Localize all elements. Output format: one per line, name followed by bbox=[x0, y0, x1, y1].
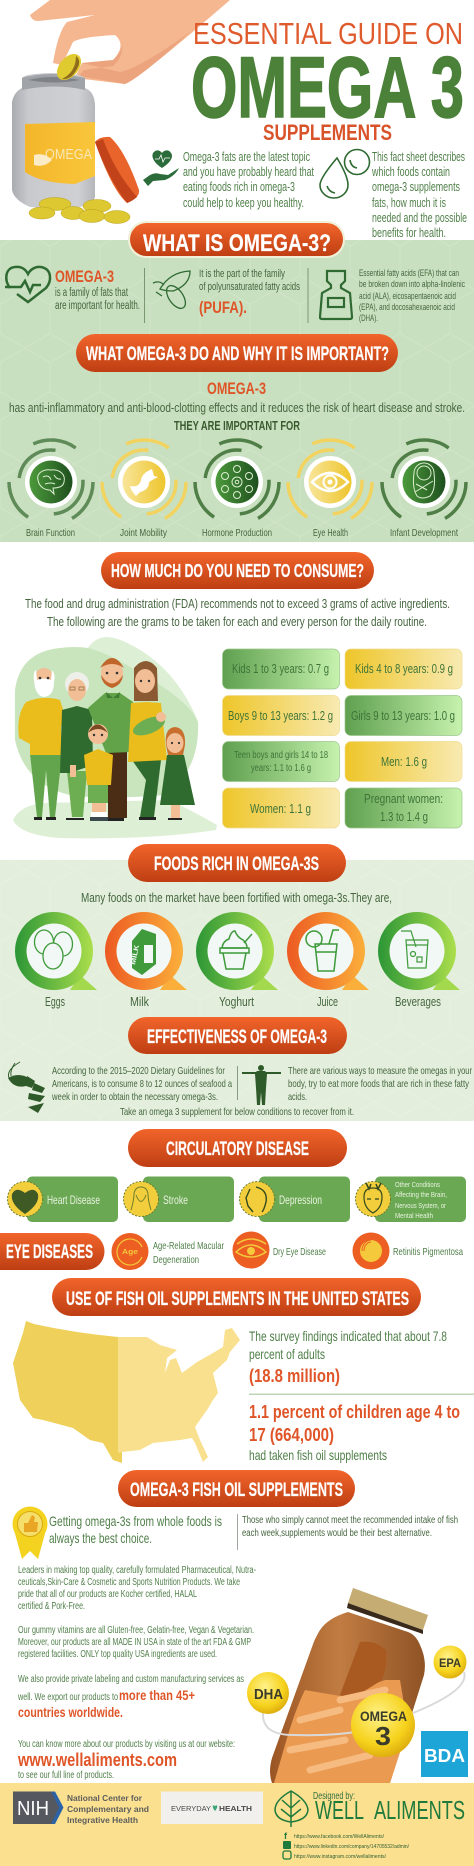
icon: heart in hand bbox=[143, 150, 179, 186]
intro text left: and you have probably heard that bbox=[183, 164, 314, 179]
logo: NIH bbox=[13, 1792, 149, 1825]
dosage tiles bbox=[222, 649, 462, 828]
intro text left: could help to keep you healthy. bbox=[183, 195, 304, 210]
dosage tiles: Men: 1.6 g bbox=[381, 755, 427, 769]
icon: DHA ball: DHA bbox=[254, 1686, 283, 1703]
social links: f bbox=[284, 1831, 288, 1841]
logo: NIH: Integrative Health bbox=[67, 1815, 138, 1825]
text: designed by well aliments: Designed by: bbox=[313, 1791, 355, 1802]
labels: omega-3 benefits: Hormone Production bbox=[202, 527, 272, 539]
icon: hand bbox=[30, 0, 230, 84]
card: heart disease: Heart Disease bbox=[47, 1193, 100, 1207]
dosage tiles: 1.3 to 1.4 g bbox=[380, 810, 428, 824]
icon: heart with pulse bbox=[5, 267, 50, 302]
heading: circulatory disease: CIRCULATORY DISEASE bbox=[166, 1139, 309, 1160]
illustration: hand dropping a capsule into a jar bbox=[12, 0, 230, 224]
text block: dietary guidelines bbox=[51, 1065, 232, 1103]
social links bbox=[283, 1831, 409, 1860]
icon: EPA ball bbox=[434, 1646, 466, 1678]
icon: eye health bbox=[288, 440, 372, 518]
text: whole foods: always the best choice. bbox=[49, 1530, 152, 1546]
panel: what is omega-3 background bbox=[0, 240, 474, 542]
text: designed by well aliments: WELL bbox=[315, 1795, 364, 1825]
card: other conditions bbox=[356, 1176, 466, 1222]
social links: https://www.linkedin.com/company/14705532/admin/ bbox=[294, 1844, 409, 1850]
text block: company description bbox=[17, 1565, 256, 1781]
text block: why important bbox=[9, 379, 465, 433]
card: other conditions: Other Conditions bbox=[395, 1180, 440, 1189]
text block: why important: THEY ARE IMPORTANT FOR bbox=[174, 418, 300, 433]
icon: jar lid bbox=[95, 137, 139, 203]
card: stroke: Stroke bbox=[163, 1193, 188, 1207]
icon: fish and capsule bbox=[153, 271, 190, 312]
card: other conditions: Nervous System, or bbox=[395, 1201, 446, 1210]
icon: beverages bbox=[378, 912, 460, 990]
text block: FDA recommendation bbox=[25, 596, 450, 629]
text block: PUFA: (PUFA). bbox=[199, 298, 247, 317]
logo: NIH: National Center for bbox=[67, 1793, 143, 1803]
text: alternative bbox=[242, 1515, 458, 1539]
text block: survey children: 17 (664,000) bbox=[249, 1425, 334, 1445]
icon: retinitis pigmentosa bbox=[352, 1232, 390, 1270]
text block: dietary guidelines: Americans, is to consume 8 to 12 ounces of seafood a bbox=[52, 1078, 232, 1090]
icon: jar: OMEGA bbox=[45, 146, 92, 163]
text: whole foods: Getting omega-3s from whole foods is bbox=[49, 1513, 222, 1529]
icon: jar bbox=[12, 73, 95, 209]
person: grandfather bbox=[18, 668, 67, 820]
text: whole foods bbox=[49, 1513, 222, 1546]
social links: https://www.instagram.com/wellaliments/ bbox=[294, 1854, 386, 1860]
icon: omega 3 ball bbox=[351, 1693, 415, 1757]
heading: eye diseases: EYE DISEASES bbox=[6, 1242, 93, 1263]
text block: survey children bbox=[249, 1402, 460, 1463]
text: macular degeneration: Degeneration bbox=[153, 1254, 199, 1266]
icon: bottle cap bbox=[348, 1588, 428, 1630]
person: father bbox=[88, 658, 133, 821]
logo: NIH: Complementary and bbox=[67, 1804, 149, 1814]
text block: measure omegas bbox=[288, 1065, 472, 1103]
logo: BDA: BDA bbox=[424, 1746, 465, 1766]
text block: company description: certified & Pork-Free. bbox=[18, 1601, 85, 1612]
social links: https://www.facebook.com/WellAliments/ bbox=[294, 1834, 384, 1840]
text block: omega-3 definition: are important for health. bbox=[55, 300, 140, 312]
person: boy bbox=[84, 724, 113, 821]
text block: company description: to see our full line of products. bbox=[18, 1770, 114, 1781]
card: depression bbox=[240, 1176, 350, 1222]
text block: company description: registered facilities. ONLY top quality USA ingredients are used. bbox=[18, 1649, 217, 1660]
text block: PUFA: of polyunsaturated fatty acids bbox=[199, 281, 300, 293]
icon: shrimp bbox=[8, 1062, 45, 1113]
icon: hormone production bbox=[195, 440, 279, 518]
heading: what is omega-3: WHAT IS OMEGA-3? bbox=[143, 230, 331, 257]
text block: survey adults: (18.8 million) bbox=[249, 1366, 340, 1386]
dosage tiles: Kids 1 to 3 years: 0.7 g bbox=[232, 662, 329, 676]
orbit lines bbox=[263, 1672, 465, 1735]
icon: age-related macular degeneration: Age bbox=[122, 1249, 138, 1256]
text block: omega-3 definition: is a family of fats that bbox=[55, 287, 129, 299]
text block: measure omegas: acids. bbox=[288, 1091, 307, 1103]
person: mother and baby bbox=[128, 661, 168, 820]
icon: infant development bbox=[382, 440, 466, 518]
icon: thumbs-up badge bbox=[12, 1506, 48, 1559]
icon: omega 3 ball: OMEGA bbox=[360, 1708, 407, 1724]
icon: dry eye bbox=[232, 1232, 270, 1268]
icon: milk bbox=[105, 912, 187, 990]
heading: use of fish oil bbox=[52, 1278, 421, 1316]
icon: EPA ball: EPA bbox=[439, 1656, 461, 1670]
icon: milk: MILK bbox=[130, 944, 141, 965]
heading: what omega-3 do bbox=[76, 334, 398, 372]
text block: essential fatty acids: (DHA). bbox=[359, 313, 378, 324]
illustration: omega-3 bottle bbox=[247, 1588, 466, 1783]
map: united states bbox=[13, 1321, 240, 1463]
icon: age-related macular degeneration bbox=[112, 1233, 148, 1270]
icon: bottle bbox=[320, 271, 352, 319]
text block: omega-3 definition: OMEGA-3 bbox=[55, 267, 114, 286]
text block: omega-3 definition bbox=[55, 267, 140, 312]
text block: dietary guidelines: According to the 2015–2020 Dietary Guidelines for bbox=[52, 1065, 225, 1077]
labels: foods: Eggs bbox=[45, 994, 65, 1009]
text block: company description: You can know more about our products by visiting us at our website: bbox=[18, 1739, 235, 1750]
heading: how much bbox=[101, 552, 374, 589]
heading: how much: HOW MUCH DO YOU NEED TO CONSUME? bbox=[111, 561, 364, 581]
illustration: family bbox=[13, 637, 217, 838]
text block: survey adults: percent of adults bbox=[249, 1346, 325, 1362]
text block: company description: more than 45+ bbox=[119, 1688, 195, 1703]
icon: brain function bbox=[9, 440, 93, 518]
heading: effectiveness bbox=[128, 1017, 347, 1054]
person: girl bbox=[160, 727, 195, 820]
text block: company description: ceuticals,Skin-Care & Cosmetic and Sports Nutrition Products. We take bbox=[18, 1577, 240, 1588]
title: SUPPLEMENTS bbox=[263, 120, 392, 145]
text: designed by well aliments bbox=[313, 1791, 465, 1825]
heading: circulatory disease bbox=[128, 1129, 347, 1167]
text block: survey adults bbox=[249, 1328, 447, 1386]
icon: eggs bbox=[15, 912, 97, 990]
card: stroke bbox=[124, 1176, 234, 1222]
icon: yoghurt bbox=[196, 912, 278, 990]
dosage tiles: Boys 9 to 13 years: 1.2 g bbox=[228, 709, 333, 723]
text block: dietary guidelines: week in order to obtain the necessary omega-3s. bbox=[51, 1091, 218, 1103]
text: macular degeneration bbox=[153, 1240, 224, 1266]
text block: why important: OMEGA-3 bbox=[207, 379, 266, 398]
person: grandmother bbox=[60, 672, 93, 820]
labels: foods bbox=[45, 994, 441, 1009]
heading: omega-3 fish oil supplements: OMEGA-3 FISH OIL SUPPLEMENTS bbox=[130, 1480, 343, 1501]
logo: everyday health: EVERYDAY bbox=[171, 1804, 211, 1813]
labels: foods: Yoghurt bbox=[219, 994, 254, 1009]
logo: everyday health: HEALTH bbox=[219, 1804, 252, 1813]
dosage tiles: Pregnant women: bbox=[364, 792, 443, 806]
heading: what is omega-3 bbox=[128, 221, 345, 258]
icon: oil drops bbox=[320, 150, 370, 198]
icon: human silhouette bbox=[242, 1065, 281, 1105]
card: other conditions: Affecting the Brain, bbox=[395, 1190, 447, 1199]
icon: juice bbox=[287, 912, 369, 990]
heading: eye diseases bbox=[0, 1233, 104, 1270]
intro text left bbox=[183, 149, 314, 210]
card: other conditions: Mental Health bbox=[395, 1211, 433, 1220]
text block: company description: Our gummy vitamins are all Gluten-free, Gelatin-free, Vegan & Vegetarian. bbox=[18, 1625, 254, 1636]
text: macular degeneration: Age-Related Macular bbox=[153, 1240, 224, 1252]
labels: omega-3 benefits: Joint Mobility bbox=[120, 527, 168, 539]
footer band bbox=[0, 1783, 474, 1866]
panel: foods background bbox=[0, 860, 474, 1121]
text block: company description: We also provide private labeling and custom manufacturing services as bbox=[18, 1674, 244, 1685]
intro text right bbox=[371, 149, 467, 240]
dosage tiles: Teen boys and girls 14 to 18 bbox=[234, 750, 328, 761]
dosage tiles: years: 1.1 to 1.6 g bbox=[251, 763, 311, 774]
labels: foods: Juice bbox=[317, 994, 338, 1009]
heading: effectiveness: EFFECTIVENESS OF OMEGA-3 bbox=[147, 1027, 327, 1048]
labels: foods: Beverages bbox=[395, 994, 441, 1009]
text: supplement note: Take an omega 3 supplement for below conditions to recover from it. bbox=[120, 1106, 354, 1118]
text block: essential fatty acids bbox=[359, 268, 465, 324]
dosage tiles: Women: 1.1 g bbox=[250, 802, 311, 816]
labels: omega-3 benefits bbox=[26, 527, 458, 539]
logo: everyday health bbox=[161, 1792, 263, 1824]
logo: BDA bbox=[421, 1731, 468, 1777]
text: dry eye: Dry Eye Disease bbox=[273, 1246, 326, 1258]
icon: loose capsules bbox=[29, 198, 130, 224]
heading: omega-3 fish oil supplements bbox=[118, 1470, 355, 1507]
heading: foods rich in omega-3s bbox=[128, 844, 346, 882]
text block: company description: pride that all of our products are Kocher certified, HALAL bbox=[18, 1589, 197, 1600]
icon: omega 3 ball: 3 bbox=[375, 1721, 391, 1751]
text block: company description: Moreover, our products are all MADE IN USA in state of the art FDA & GMP bbox=[18, 1637, 251, 1648]
icon: capsule in fingers bbox=[52, 49, 86, 85]
intro text left: Omega-3 fats are the latest topic bbox=[183, 149, 310, 164]
text block: PUFA: It is the part of the family bbox=[199, 268, 285, 280]
card: heart disease bbox=[8, 1176, 118, 1222]
logo: well aliments leaf bbox=[275, 1791, 308, 1827]
icon: joint mobility bbox=[102, 440, 186, 518]
text block: company description: Leaders in making top quality, carefully formulated Pharmaceutical, Nutra- bbox=[18, 1565, 256, 1576]
labels: foods: Milk bbox=[130, 994, 149, 1009]
logo: NIH: NIH bbox=[17, 1798, 49, 1820]
text block: company description: www.wellaliments.com bbox=[17, 1750, 177, 1770]
text block: company description: well. We export our products to bbox=[17, 1692, 118, 1703]
text block: company description: countries worldwide. bbox=[18, 1705, 123, 1720]
card: depression: Depression bbox=[279, 1193, 322, 1207]
intro text left: eating foods rich in omega-3 bbox=[183, 179, 295, 194]
labels: omega-3 benefits: Brain Function bbox=[26, 527, 75, 539]
labels: omega-3 benefits: Eye Health bbox=[313, 527, 348, 539]
text block: survey children: had taken fish oil supplements bbox=[249, 1447, 387, 1463]
icon: DHA ball bbox=[247, 1672, 289, 1714]
heading: foods rich in omega-3s: FOODS RICH IN OMEGA-3S bbox=[154, 854, 319, 875]
text block: PUFA bbox=[199, 268, 300, 317]
